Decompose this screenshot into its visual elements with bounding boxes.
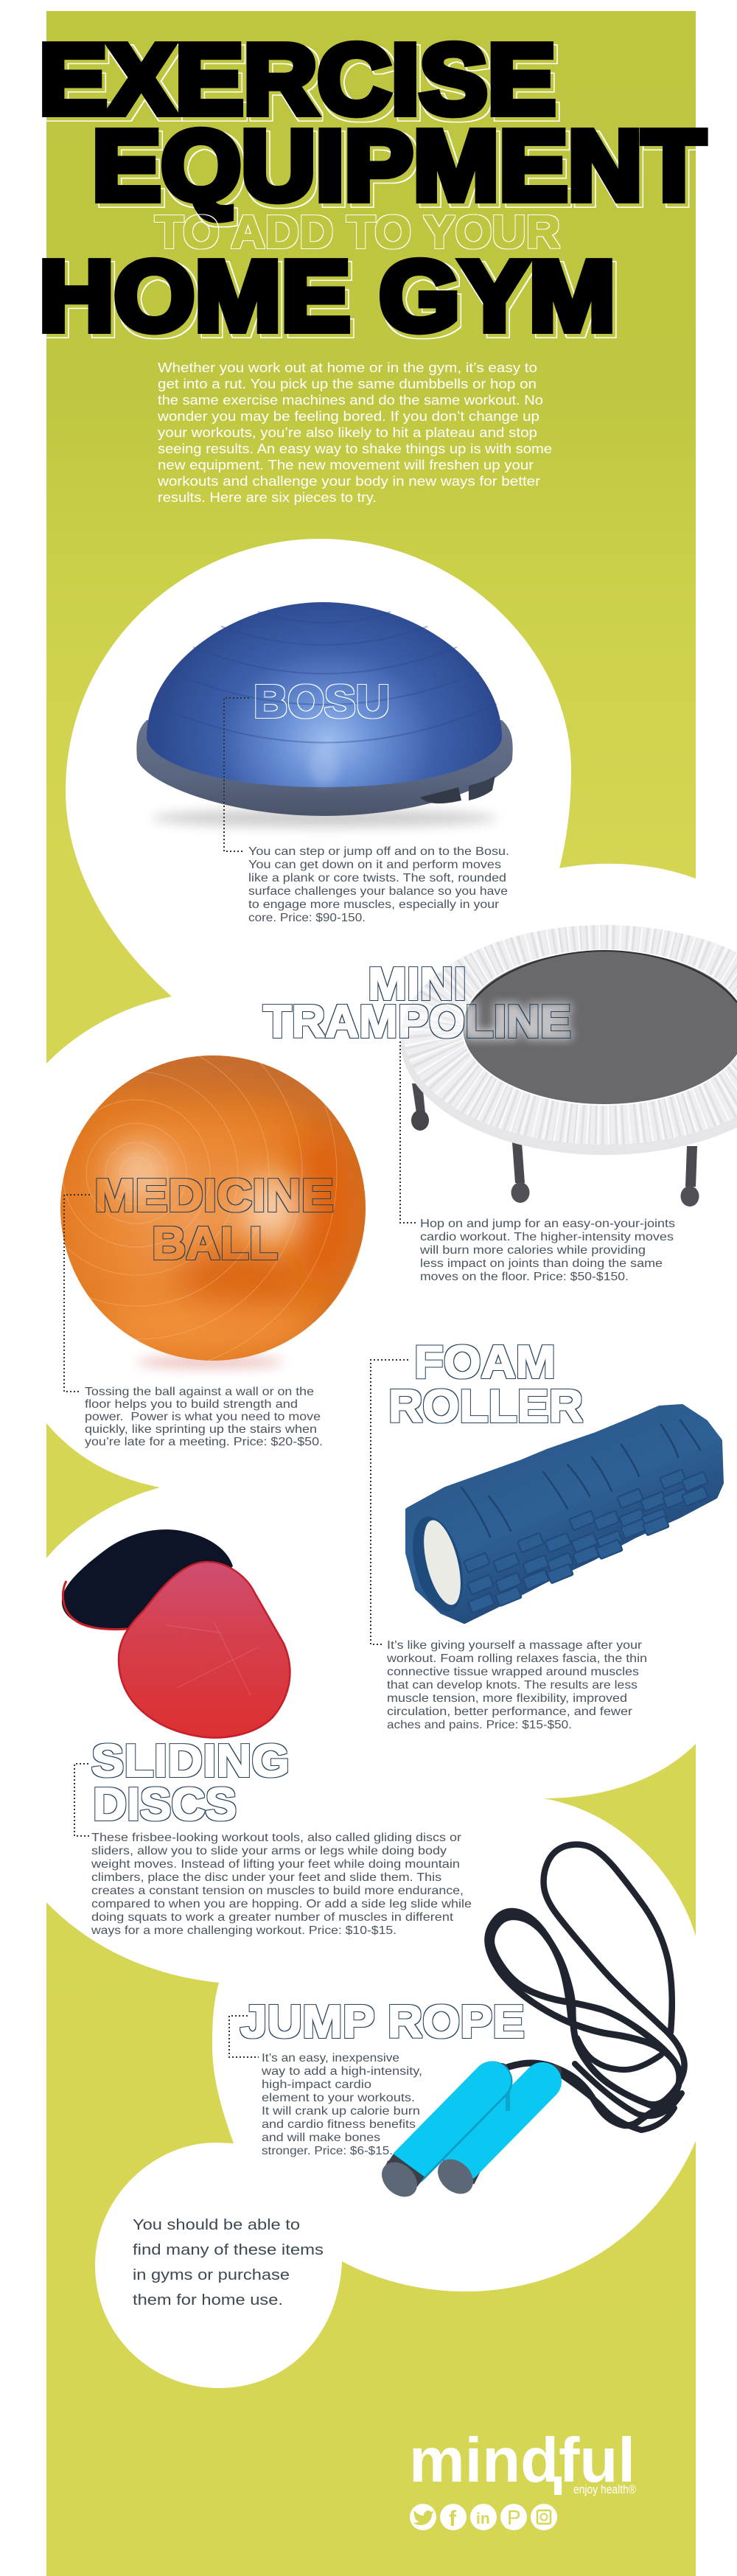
heading: foam roller	[388, 1337, 583, 1432]
text: medicine ball: floor helps you to build strength and	[85, 1398, 298, 1411]
text: medicine ball: Tossing the ball against a wall or on the	[85, 1386, 314, 1398]
text: sliding discs: climbers, place the disc under your feet and slide them. This	[91, 1871, 441, 1884]
white blob background	[0, 539, 737, 2388]
intro text: new equipment. The new movement will freshen up your	[158, 457, 534, 472]
icon: linkedin: in	[476, 2510, 490, 2527]
text: foam roller: workout. Foam rolling relaxes fascia, the thin	[386, 1652, 647, 1665]
text: bosu: You can get down on it and perform moves	[248, 859, 501, 871]
text: foam roller: connective tissue wrapped around muscles	[387, 1666, 639, 1678]
heading: foam roller: ROLLER	[388, 1381, 583, 1432]
intro text: results. Here are six pieces to try.	[158, 489, 377, 505]
intro text	[157, 360, 552, 505]
icon: twitter	[410, 2504, 436, 2530]
text: foam roller: muscle tension, more flexibility, improved	[387, 1692, 627, 1705]
social icons	[410, 2504, 557, 2531]
text: sliding discs: ways for a more challenging workout. Price: $10-$15.	[91, 1924, 397, 1937]
text: sliding discs: These frisbee-looking workout tools, also called gliding discs or	[91, 1832, 462, 1844]
text: medicine ball: you’re late for a meeting. Price: $20-$50.	[85, 1436, 323, 1448]
heading: sliding discs	[91, 1736, 290, 1830]
heading: mini trampoline: TRAMPOLINE	[263, 996, 571, 1047]
text: jump rope: stronger. Price: $6-$15.	[262, 2145, 393, 2157]
text: jump rope: high-impact cardio	[262, 2078, 371, 2091]
leader: bosu	[224, 698, 249, 851]
leader: sliding discs	[74, 1764, 90, 1836]
image: medicine ball	[60, 1055, 366, 1375]
heading: sliding discs: DISCS	[93, 1779, 237, 1830]
closing text	[133, 2216, 324, 2308]
text: sliding discs: doing squats to work a greater number of muscles in different	[91, 1911, 454, 1924]
heading: sliding discs: SLIDING	[91, 1736, 290, 1787]
text: jump rope: and cardio fitness benefits	[262, 2118, 416, 2131]
text: foam roller	[386, 1639, 647, 1731]
heading: medicine ball	[94, 1170, 334, 1269]
title: TO ADD TO YOUR	[155, 207, 560, 258]
icon: pinterest	[500, 2504, 527, 2530]
logo: mindful: enjoy health®	[573, 2482, 636, 2496]
text: sliding discs: sliders, allow you to slide your arms or legs while doing body	[91, 1845, 447, 1857]
intro text: your workouts, you’re also likely to hit a plateau and stop	[158, 425, 537, 440]
closing text: find many of these items	[133, 2241, 324, 2258]
intro text: seeing results. An easy way to shake things up is with some	[158, 441, 552, 456]
icon: linkedin	[470, 2504, 497, 2530]
text: mini trampoline: moves on the floor. Price: $50-$150.	[420, 1271, 629, 1283]
text: jump rope: way to add a high-intensity,	[261, 2065, 422, 2078]
text: medicine ball	[85, 1386, 323, 1448]
image: foam roller	[404, 1407, 721, 1621]
text: medicine ball: quickly, like sprinting up the stairs when	[85, 1423, 317, 1436]
text: foam roller: aches and pains. Price: $15-$50.	[387, 1719, 572, 1731]
title: HOME GYM	[39, 240, 615, 352]
title outline shadows: EXERCISE	[43, 27, 559, 139]
text: bosu: core. Price: $90-150.	[248, 912, 366, 924]
icon: instagram	[531, 2504, 557, 2530]
icon: facebook	[440, 2504, 467, 2531]
logo: mindful: mindful	[409, 2426, 635, 2496]
text: mini trampoline: less impact on joints than doing the same	[420, 1257, 663, 1270]
title	[39, 24, 709, 355]
heading: mini trampoline: MINI	[368, 959, 467, 1010]
title outline shadows	[43, 27, 709, 355]
text: sliding discs: compared to when you are hopping. Or add a side leg slide while	[91, 1898, 472, 1910]
text: sliding discs: weight moves. Instead of lifting your feet while doing mountain	[91, 1858, 460, 1871]
intro text: workouts and challenge your body in new ways for better	[157, 473, 540, 489]
heading: medicine ball: BALL	[152, 1218, 278, 1269]
intro text: the same exercise machines and do the same workout. No	[158, 392, 543, 408]
heading: foam roller: FOAM	[414, 1337, 556, 1388]
text: bosu: You can step or jump off and on to the Bosu.	[248, 845, 509, 858]
text: foam roller: that can develop knots. The results are less	[387, 1679, 638, 1692]
text: bosu: to engage more muscles, especially in your	[248, 898, 500, 911]
image: sliding discs	[62, 1529, 290, 1738]
image: mini trampoline	[400, 925, 737, 1207]
heading: medicine ball: MEDICINE	[94, 1170, 334, 1221]
intro text: wonder you may be feeling bored. If you don’t change up	[157, 408, 539, 424]
text: sliding discs: creates a constant tension on muscles to build more endurance,	[91, 1885, 464, 1897]
heading: bosu: BOSU	[254, 677, 390, 727]
text: jump rope	[261, 2052, 422, 2157]
text: mini trampoline	[419, 1218, 675, 1283]
text: medicine ball: power. Power is what you need to move	[85, 1411, 321, 1423]
intro text: Whether you work out at home or in the gym, it’s easy to	[158, 360, 537, 375]
heading: mini trampoline	[263, 959, 571, 1047]
text: bosu	[248, 845, 509, 924]
title outline shadows: HOME GYM	[43, 244, 619, 355]
title: EXERCISE	[39, 24, 556, 135]
title: EQUIPMENT	[92, 110, 705, 221]
text: jump rope: It’s an easy, inexpensive	[262, 2052, 399, 2064]
heading: jump rope: JUMP ROPE	[240, 1997, 525, 2048]
heading: mini trampoline: TRAMPOLINE	[263, 996, 571, 1047]
text: mini trampoline: cardio workout. The higher-intensity moves	[420, 1231, 674, 1243]
text: bosu: surface challenges your balance so you have	[248, 885, 508, 898]
closing text: them for home use.	[133, 2291, 283, 2308]
image: jump rope	[375, 1844, 685, 2204]
icon: pinterest: P	[507, 2506, 521, 2529]
text: sliding discs	[91, 1832, 472, 1937]
text: jump rope: It will crank up calorie burn	[262, 2105, 420, 2118]
leader: foam roller	[371, 1360, 408, 1644]
text: foam roller: It’s like giving yourself a massage after your	[387, 1639, 643, 1652]
closing text: You should be able to	[133, 2216, 300, 2233]
text: foam roller: circulation, better performance, and fewer	[387, 1706, 633, 1718]
intro text: get into a rut. You pick up the same dumbbells or hop on	[158, 376, 537, 391]
closing text: in gyms or purchase	[133, 2266, 290, 2283]
image: bosu ball	[136, 602, 513, 827]
icon: facebook: f	[449, 2507, 457, 2531]
leader: mini trampoline	[400, 1041, 417, 1223]
text: bosu: like a plank or core twists. The soft, rounded	[248, 872, 506, 884]
leader: jump rope	[229, 2016, 259, 2057]
text: jump rope: and will make bones	[262, 2132, 380, 2144]
title outline shadows: EQUIPMENT	[96, 114, 709, 225]
text: mini trampoline: Hop on and jump for an easy-on-your-joints	[420, 1218, 675, 1230]
leader: medicine ball	[64, 1195, 90, 1392]
text: mini trampoline: will burn more calories while providing	[419, 1244, 646, 1257]
text: jump rope: element to your workouts.	[262, 2092, 415, 2104]
